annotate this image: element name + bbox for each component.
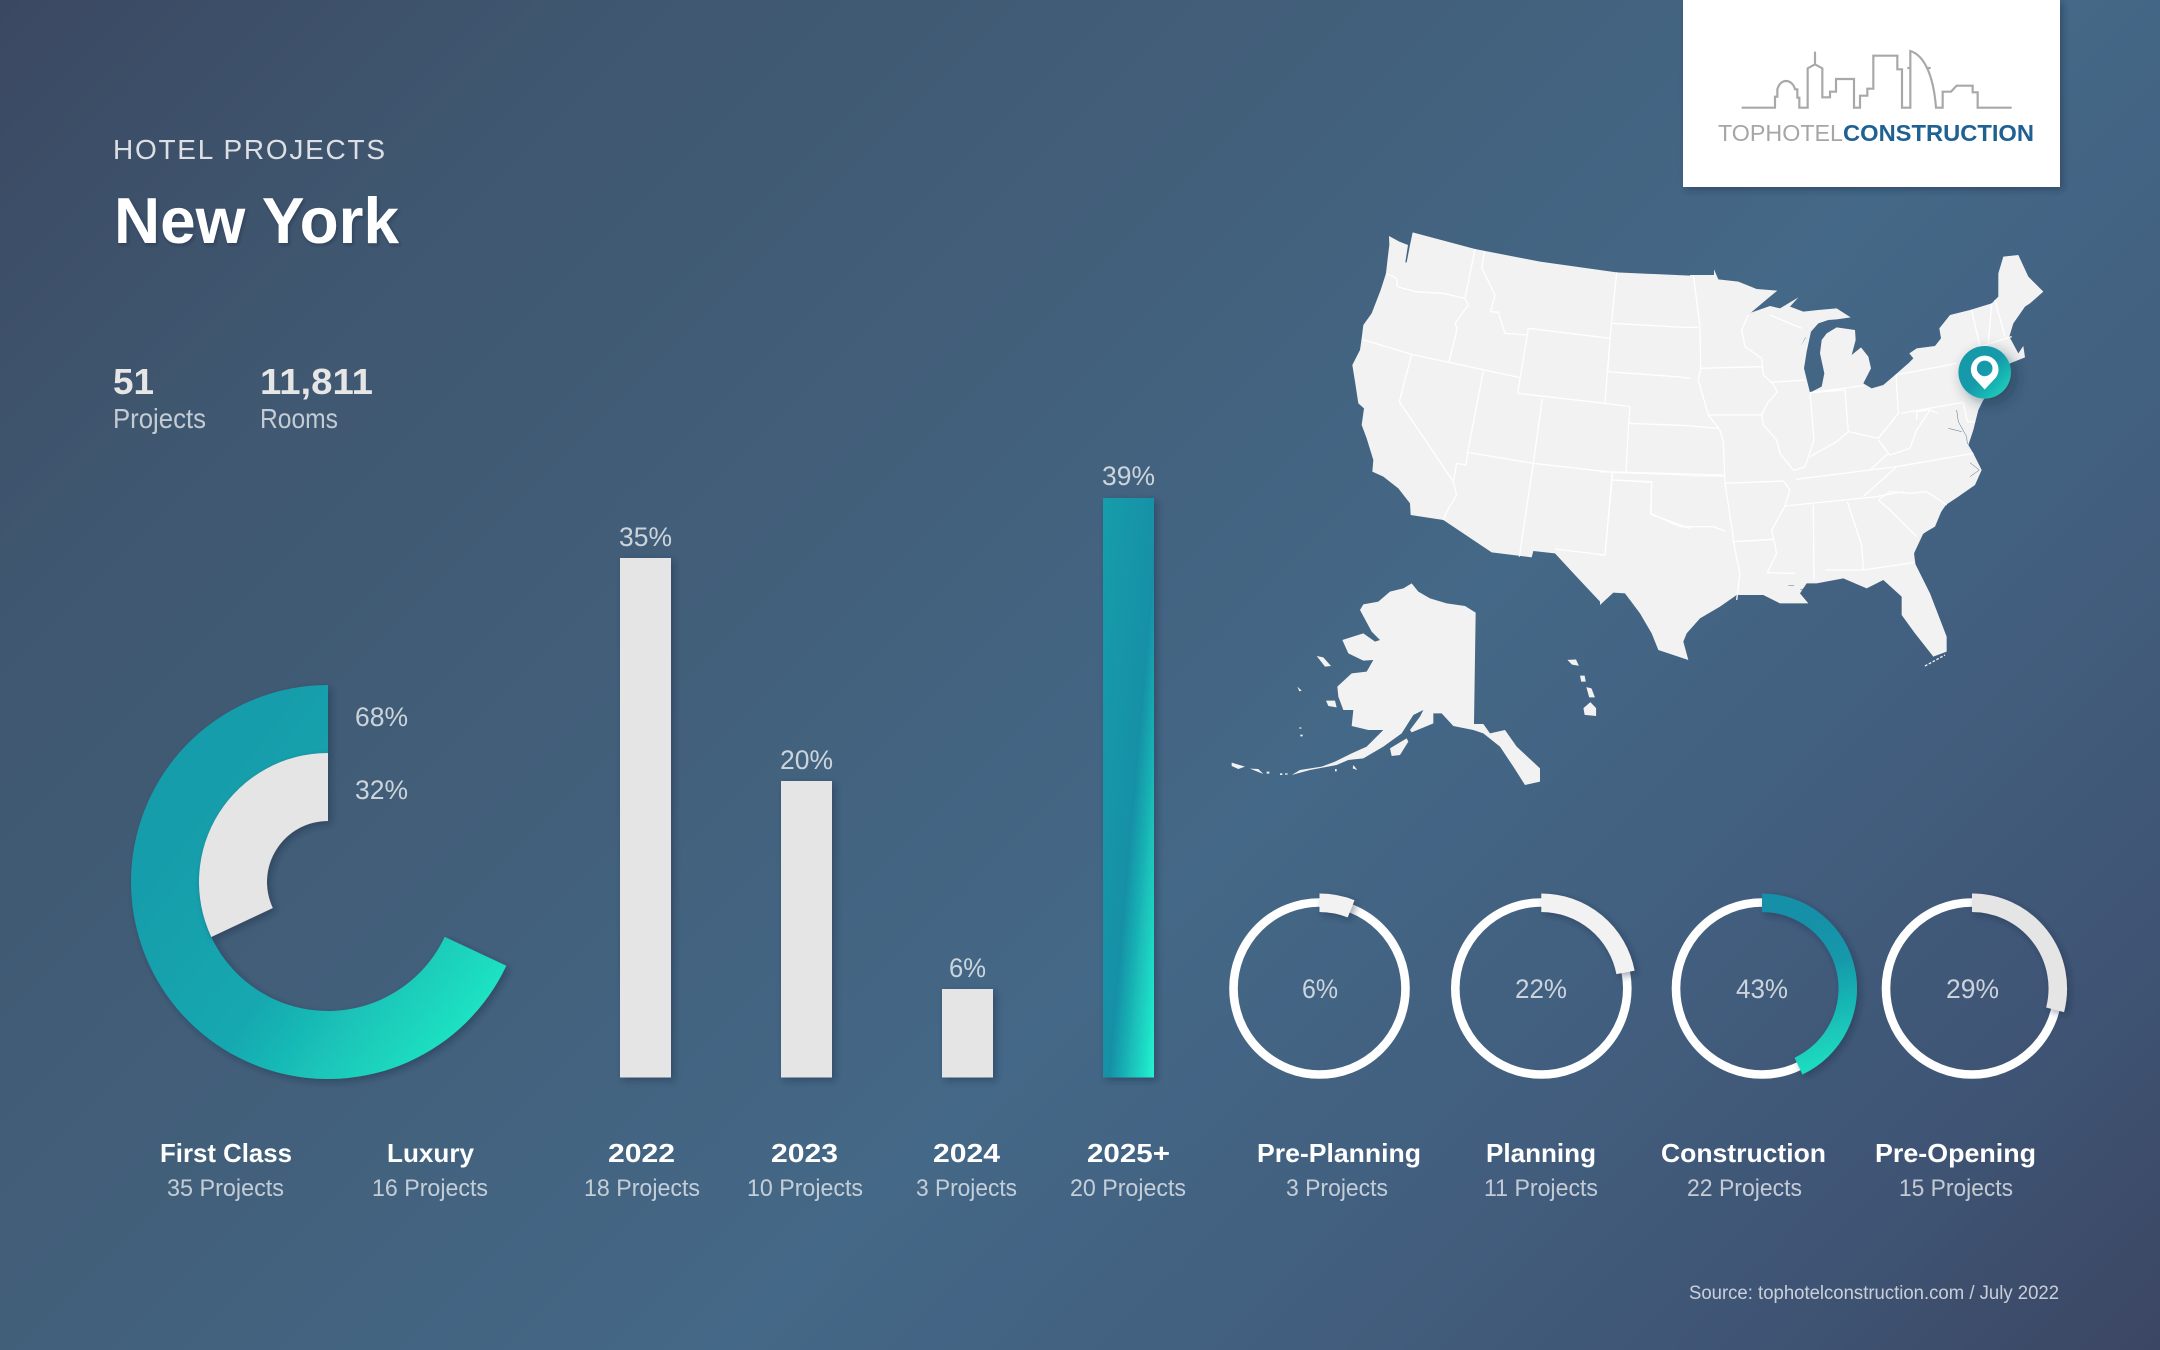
year label: 2023 bbox=[747, 1138, 863, 1202]
ring chart: pre-planning: 6% bbox=[1302, 974, 1338, 1004]
bar: 2025+: 39% bbox=[1102, 461, 1155, 491]
stage label: pre-opening: Pre-Opening bbox=[1875, 1138, 2036, 1168]
category label: luxury bbox=[372, 1138, 488, 1202]
bar: 2024 bbox=[942, 953, 993, 1078]
stat: rooms total: 11,811 bbox=[260, 361, 373, 402]
donut labels: 68% bbox=[355, 702, 408, 732]
year label: 2023: 2023 bbox=[771, 1138, 838, 1168]
donut labels: 32% bbox=[355, 775, 408, 805]
map: Florida keys bbox=[1925, 655, 1945, 666]
stage label: planning: 11 Projects bbox=[1484, 1175, 1598, 1202]
ring chart: pre-opening bbox=[1886, 902, 2058, 1074]
year label: 2024: 3 Projects bbox=[916, 1175, 1017, 1202]
bar: 2022: 35% bbox=[619, 522, 672, 552]
category label: first class: First Class bbox=[160, 1138, 292, 1168]
map: Hawaii bbox=[1567, 659, 1596, 716]
stat: projects total bbox=[113, 361, 206, 434]
year label: 2024 bbox=[916, 1138, 1017, 1202]
stat: rooms total bbox=[260, 361, 373, 434]
subtitle: hotel projects: HOTEL PROJECTS bbox=[113, 134, 385, 165]
stage label: construction bbox=[1661, 1138, 1826, 1202]
stage label: pre-opening bbox=[1875, 1138, 2036, 1202]
logo wordmark bbox=[1718, 120, 2034, 146]
stage label: pre-planning bbox=[1257, 1138, 1421, 1202]
donut labels bbox=[355, 702, 408, 805]
map: contiguous land mass bbox=[1352, 232, 2043, 660]
year label: 2022 bbox=[584, 1138, 700, 1202]
donut chart: hotel class bbox=[131, 685, 506, 1079]
map: bays and inlets bbox=[1788, 410, 1979, 590]
ring chart: construction: 43% bbox=[1736, 974, 1788, 1004]
stat: projects total: Projects bbox=[113, 403, 206, 434]
bar: 2025+ bbox=[1102, 461, 1155, 1078]
category label: luxury: 16 Projects bbox=[372, 1175, 488, 1202]
bar: 2023: 20% bbox=[780, 745, 833, 775]
stage label: planning: Planning bbox=[1486, 1138, 1596, 1168]
ring chart: pre-planning bbox=[1234, 902, 1406, 1074]
bar: 2024: 6% bbox=[949, 953, 986, 983]
year label: 2022: 2022 bbox=[608, 1138, 675, 1168]
stage label: pre-planning: 3 Projects bbox=[1286, 1175, 1388, 1202]
map: Alaska bbox=[1232, 583, 1540, 785]
stage label: pre-opening: 15 Projects bbox=[1899, 1175, 2013, 1202]
source note: Source: tophotelconstruction.com / July 2022 bbox=[1689, 1283, 2059, 1304]
category label: first class: 35 Projects bbox=[167, 1175, 284, 1202]
bar: 2023 bbox=[780, 745, 833, 1078]
year label: 2022: 18 Projects bbox=[584, 1175, 700, 1202]
bar: 2022 bbox=[619, 522, 672, 1078]
category label: luxury: Luxury bbox=[387, 1138, 475, 1168]
stage label: construction: 22 Projects bbox=[1687, 1175, 1802, 1202]
year label: 2025+: 2025+ bbox=[1087, 1138, 1170, 1168]
stat: rooms total: Rooms bbox=[260, 403, 338, 434]
icon: city skyline bbox=[1742, 51, 2012, 108]
map: state borders bbox=[1362, 249, 2012, 600]
donut segment: first class 68% bbox=[131, 685, 506, 1079]
donut segment: luxury 32% bbox=[199, 753, 328, 937]
ring chart: planning bbox=[1455, 902, 1627, 1074]
bar chart: opening year bbox=[619, 461, 1155, 1078]
category label: first class bbox=[160, 1138, 292, 1202]
ring chart: pre-opening: 29% bbox=[1946, 974, 1999, 1004]
stat: projects total: 51 bbox=[113, 361, 154, 402]
title: New York: New York bbox=[114, 184, 400, 257]
logo wordmark: TOPHOTEL bbox=[1718, 120, 1843, 146]
logo wordmark: CONSTRUCTION bbox=[1843, 120, 2034, 146]
logo panel bbox=[1683, 0, 2060, 187]
year label: 2025+: 20 Projects bbox=[1070, 1175, 1186, 1202]
ring chart: construction bbox=[1676, 902, 1848, 1074]
stage label: pre-planning: Pre-Planning bbox=[1257, 1138, 1421, 1168]
year label: 2024: 2024 bbox=[933, 1138, 1001, 1168]
year label: 2025+ bbox=[1070, 1138, 1186, 1202]
year label: 2023: 10 Projects bbox=[747, 1175, 863, 1202]
ring chart: planning: 22% bbox=[1515, 974, 1567, 1004]
stage label: construction: Construction bbox=[1661, 1138, 1826, 1168]
stage label: planning bbox=[1484, 1138, 1598, 1202]
icon: location pin bbox=[1958, 346, 2011, 399]
map: United States bbox=[1232, 232, 2043, 785]
